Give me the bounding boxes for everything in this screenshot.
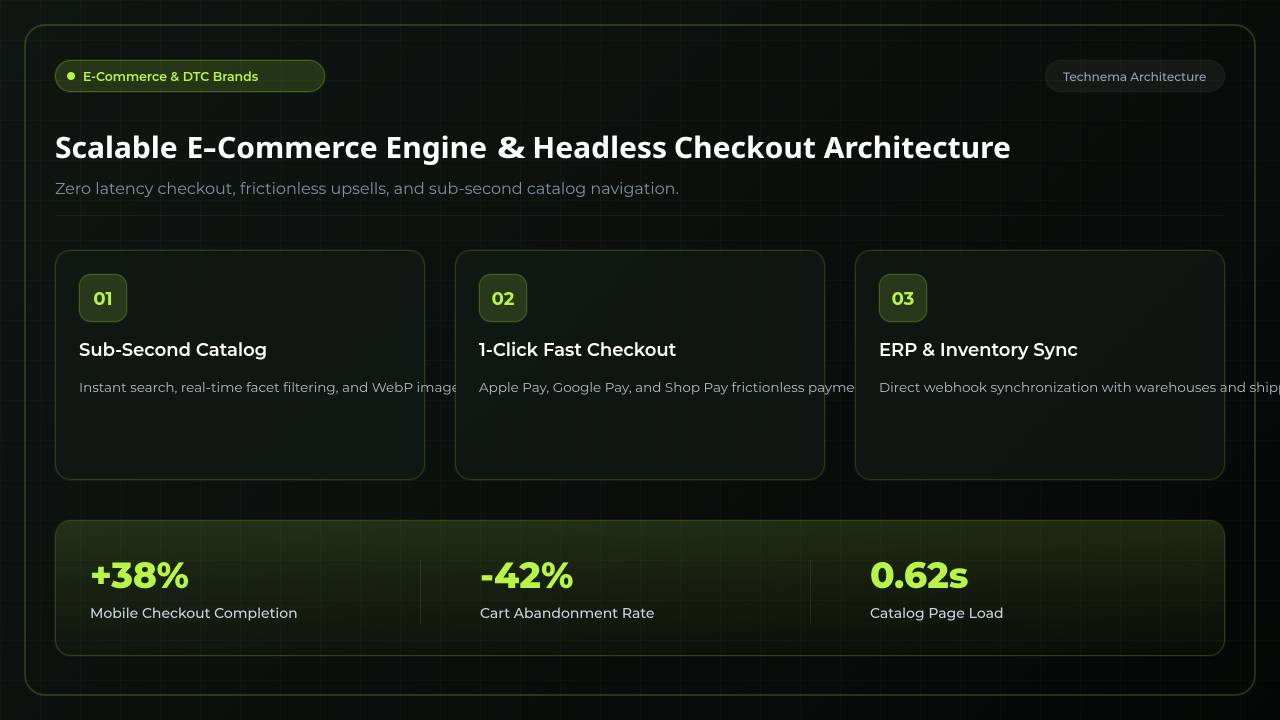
metric label: Cart Abandonment Rate: [480, 604, 654, 622]
category badge: [55, 60, 325, 92]
title: Scalable Engine Architecture: [55, 126, 1011, 167]
brand pill: [1045, 60, 1225, 92]
card heading: 1-Click Fast Checkout: [479, 339, 676, 361]
number badge 03: 03: [892, 288, 914, 310]
metric value 0.62s: 0.62s: [870, 554, 968, 598]
metric value -42%: -42%: [480, 554, 573, 598]
number badge 01: [79, 274, 127, 322]
metric label: Catalog Page Load: [870, 604, 1004, 622]
panel: card 01 Sub-Second Catalog: [54, 249, 456, 481]
metric value +38%: +38%: [90, 554, 189, 598]
number badge 02: [479, 274, 527, 322]
number badge 01: 01: [93, 288, 113, 310]
panel: card 02 1-Click Fast Checkout: [454, 249, 856, 481]
brand label: Technema Architecture: [1063, 70, 1206, 85]
badge label: E-Commerce & DTC Brands: [83, 70, 258, 85]
metric label: Mobile Checkout Completion: [90, 604, 298, 622]
title: &: [497, 126, 525, 167]
panel: card 03 ERP & Inventory Sync: [854, 249, 1280, 481]
card heading: Sub-Second Catalog: [79, 339, 267, 361]
title: Headless: [532, 126, 667, 167]
subtitle: Zero latency checkout, frictionless upsells, and sub-second catalog navigation.: [55, 180, 679, 199]
card heading: ERP & Inventory Sync: [879, 339, 1078, 361]
title: E Commerce: [186, 126, 378, 167]
title: Checkout: [674, 126, 816, 167]
panel: metrics band: [55, 520, 1225, 656]
title: -: [203, 126, 217, 167]
number badge 03: [879, 274, 927, 322]
number badge 02: 02: [492, 288, 514, 310]
badge dot: [67, 72, 75, 80]
